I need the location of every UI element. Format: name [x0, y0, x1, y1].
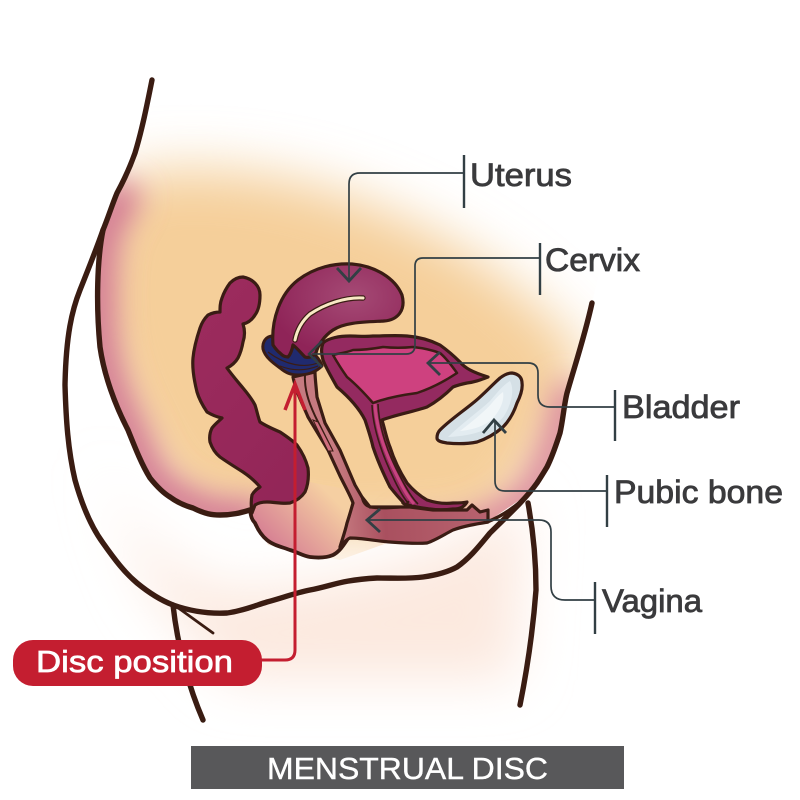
body outline	[65, 80, 592, 720]
urethra	[372, 404, 418, 504]
connector: vagina	[367, 509, 595, 634]
rectum	[193, 277, 308, 513]
menstrual disc	[263, 336, 322, 375]
label: Uterus: Uterus	[470, 157, 572, 193]
label: Cervix: Cervix	[545, 242, 640, 278]
bladder	[322, 336, 488, 510]
title bar: MENSTRUAL DISC	[267, 751, 548, 786]
vagina canal and floor	[293, 372, 488, 547]
perineum outline	[250, 510, 347, 558]
callout: disc position	[13, 640, 262, 686]
pubic bone	[437, 373, 522, 444]
bladder cavity	[333, 347, 457, 403]
label: Vagina: Vagina	[602, 583, 702, 619]
connector: cervix	[309, 243, 540, 367]
title bar	[191, 746, 624, 789]
perineum tissue	[250, 480, 352, 558]
disc position arrow	[255, 384, 305, 660]
connector: pubic bone	[483, 420, 607, 527]
label: Bladder: Bladder	[622, 389, 740, 425]
connector: uterus	[337, 155, 464, 281]
skin shading	[85, 169, 585, 680]
uterine cavity	[295, 298, 363, 340]
uterus	[273, 264, 403, 357]
callout: disc position: Disc position	[36, 644, 233, 679]
connector: bladder	[428, 352, 615, 441]
label: Pubic bone: Pubic bone	[614, 474, 783, 510]
